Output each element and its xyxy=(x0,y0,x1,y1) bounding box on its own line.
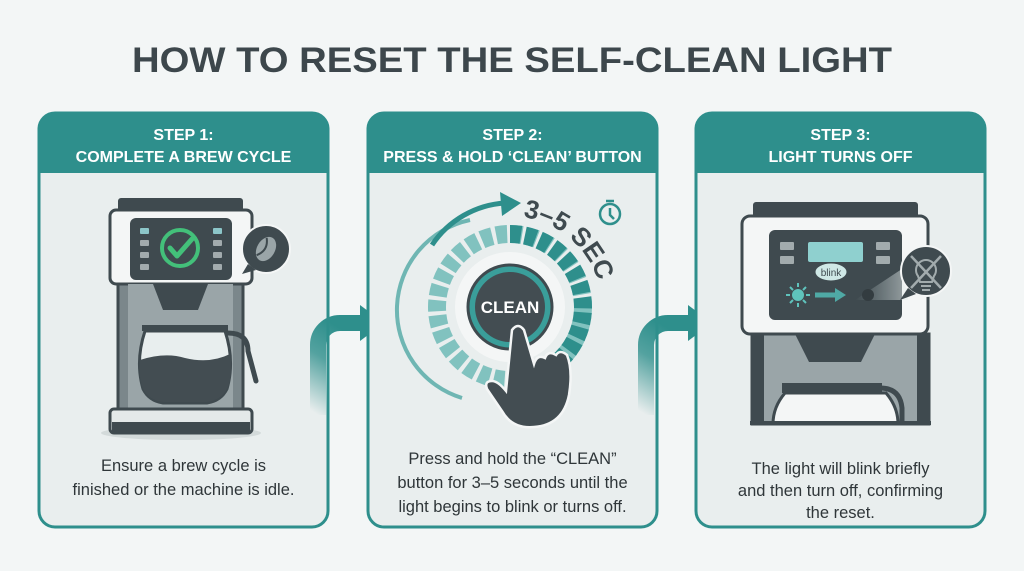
title: HOW TO RESET THE SELF-CLEAN LIGHT xyxy=(132,41,892,80)
heading: step 1: COMPLETE A BREW CYCLE xyxy=(76,149,292,166)
icon: light off bubble xyxy=(900,246,951,300)
icon: progress dial: 3–5 SEC xyxy=(524,200,613,278)
heading: step 2: PRESS & HOLD ‘CLEAN’ BUTTON xyxy=(383,149,642,166)
icon: coffee bean bubble xyxy=(242,225,290,274)
heading: step 3: LIGHT TURNS OFF xyxy=(769,149,913,166)
text: step 3 description: and then turn off, confirming xyxy=(738,482,943,500)
text: step 3 description: The light will blink briefly xyxy=(752,460,929,478)
text: step 2 description: button for 3–5 seconds until the xyxy=(397,474,628,492)
icon: progress dial xyxy=(394,192,622,400)
text: step 1 description: Ensure a brew cycle is xyxy=(101,457,266,475)
heading: step 1: STEP 1: xyxy=(153,127,214,144)
icon: pointing hand xyxy=(486,326,571,427)
text: step 1 description: finished or the machine is idle. xyxy=(73,481,294,499)
heading: step 3: STEP 3: xyxy=(810,127,871,144)
panel: step 3 xyxy=(696,113,985,527)
panel: step 2 xyxy=(366,112,658,528)
icon: coffee machine with blinking light: blink xyxy=(821,268,842,279)
arrow: step 1 to step 2 xyxy=(318,305,384,415)
heading: step 2: STEP 2: xyxy=(482,127,543,144)
panel: step 1 xyxy=(39,113,328,527)
arrow: step 2 to step 3 xyxy=(646,305,712,415)
icon: coffee machine with checkmark xyxy=(101,198,290,440)
icon: coffee machine with blinking light xyxy=(742,202,951,425)
text: step 3 description: the reset. xyxy=(806,504,875,522)
icon: progress dial: CLEAN xyxy=(481,298,539,317)
text: step 2 description: Press and hold the “CLEAN” xyxy=(408,450,617,468)
text: step 2 description: light begins to blink or turns off. xyxy=(398,498,627,516)
